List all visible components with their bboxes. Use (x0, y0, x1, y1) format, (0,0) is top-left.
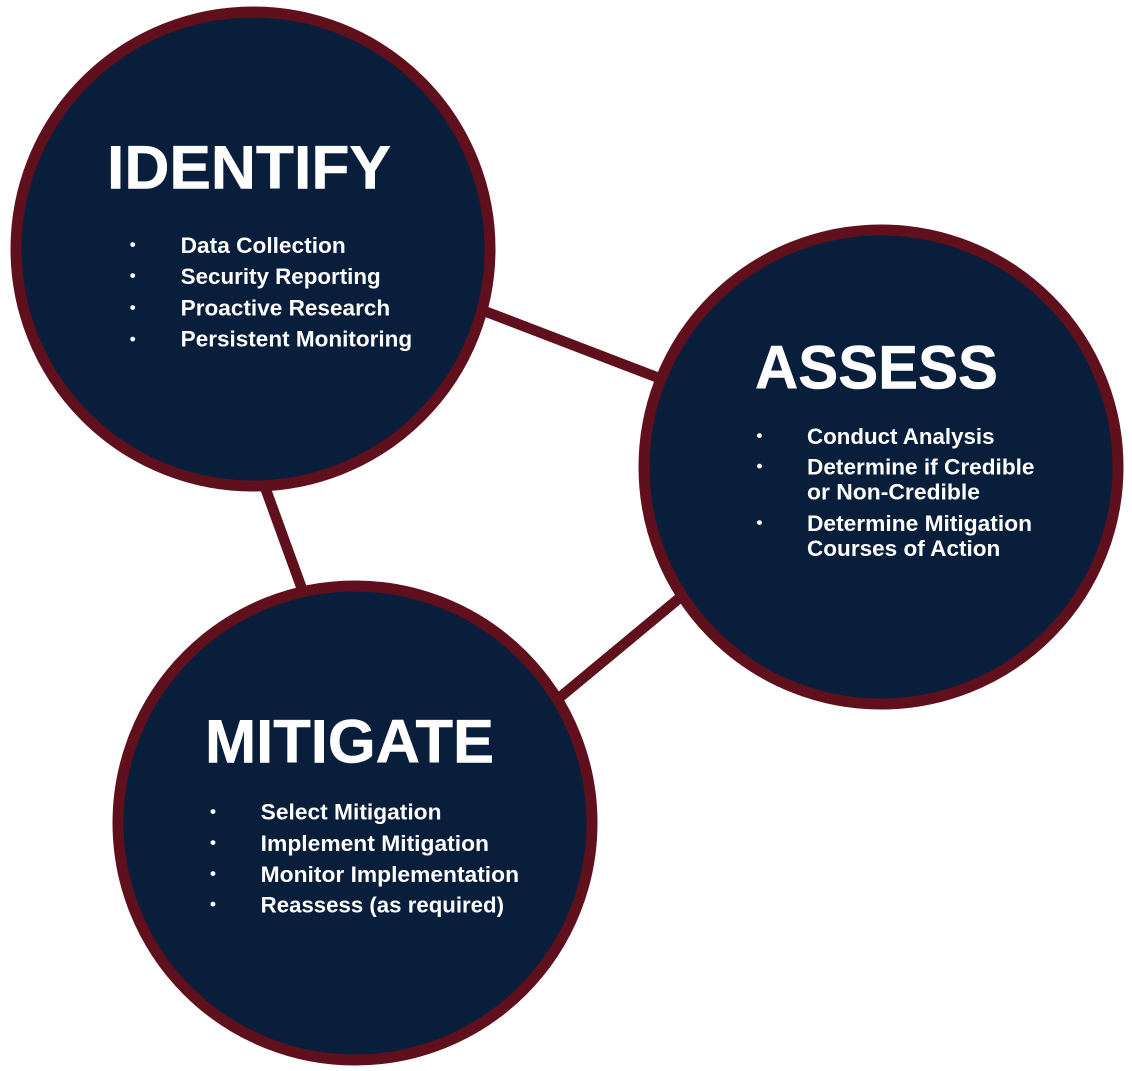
panel: mitigate (118, 586, 592, 1060)
assess list: Conduct Analysis (807, 424, 994, 449)
connector: identify to assess (470, 306, 672, 383)
identify list: • (130, 235, 136, 254)
assess list: • (756, 513, 762, 532)
identify heading: IDENTIFY (107, 134, 391, 202)
identify list: Data Collection (181, 233, 346, 258)
mitigate list: • (210, 864, 216, 883)
panel: assess (644, 230, 1118, 704)
assess circle (644, 230, 1118, 704)
identify list: Proactive Research (181, 295, 390, 320)
assess list: Determine Mitigation (807, 511, 1032, 536)
identify list: Persistent Monitoring (181, 326, 412, 352)
mitigate list: Reassess (as required) (261, 893, 504, 918)
connector: identify to mitigate (262, 480, 304, 594)
assess list: • (756, 426, 762, 445)
assess heading: ASSESS (755, 334, 998, 402)
assess list: Courses of Action (807, 536, 1000, 561)
mitigate heading: MITIGATE (205, 707, 494, 775)
assess list: • (756, 456, 762, 476)
assess list (756, 424, 1034, 561)
identify list: • (130, 266, 136, 285)
identify circle (16, 12, 490, 486)
mitigate list: • (210, 802, 216, 821)
mitigate circle (118, 586, 592, 1060)
mitigate list: Select Mitigation (261, 800, 442, 825)
connector: assess to mitigate (553, 589, 690, 703)
assess list: Determine if Credible (807, 455, 1034, 480)
identify list: • (130, 298, 136, 317)
mitigate list: Implement Mitigation (261, 831, 489, 856)
identify list: • (130, 330, 136, 348)
identify list: Security Reporting (181, 264, 381, 289)
panel: identify (16, 12, 490, 486)
identify list (130, 233, 412, 352)
assess list: or Non-Credible (807, 480, 980, 504)
mitigate list: • (210, 833, 216, 852)
mitigate list (210, 800, 519, 918)
mitigate list: • (210, 894, 216, 914)
mitigate list: Monitor Implementation (261, 862, 519, 887)
